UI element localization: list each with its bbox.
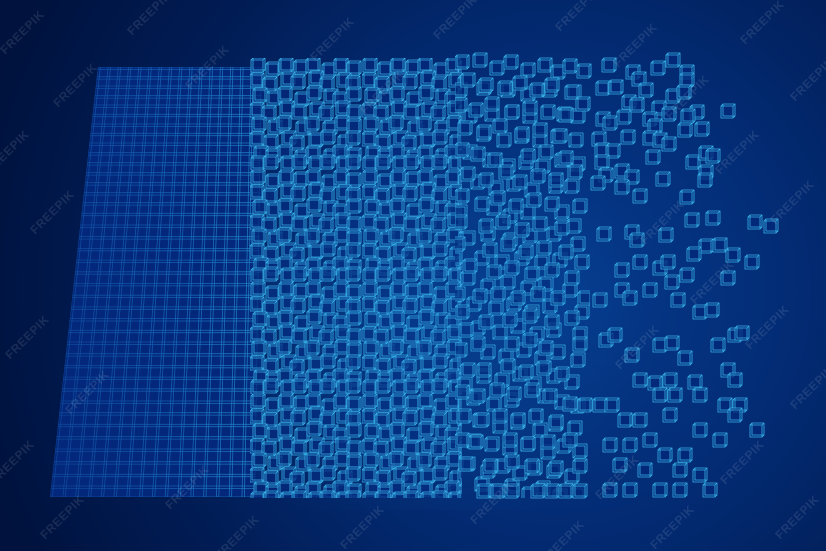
watermarks: FREEPIK xyxy=(337,502,387,551)
watermarks: FREEPIK xyxy=(647,502,697,551)
watermarks: FREEPIK xyxy=(612,322,662,372)
watermarks: FREEPIK xyxy=(50,60,100,110)
watermarks: FREEPIK xyxy=(37,492,87,542)
scattered cubes: right side xyxy=(563,53,778,497)
perspective wireframe grid xyxy=(40,60,270,500)
watermarks: FREEPIK xyxy=(712,127,762,177)
watermarks: FREEPIK xyxy=(687,257,737,307)
watermarks: FREEPIK xyxy=(717,437,767,487)
watermarks: FREEPIK xyxy=(592,452,642,502)
watermarks: FREEPIK xyxy=(742,302,792,352)
watermarks: FREEPIK xyxy=(357,67,407,117)
watermarks: FREEPIK xyxy=(637,197,687,247)
watermarks: FREEPIK xyxy=(772,492,822,542)
dense cube field xyxy=(250,58,462,498)
watermarks: FREEPIK xyxy=(182,42,232,92)
watermarks: FREEPIK xyxy=(27,187,77,237)
watermarks: FREEPIK xyxy=(662,72,712,122)
scattered cubes: transition zone xyxy=(448,53,592,503)
bottom row of cubes xyxy=(477,484,587,498)
watermarks: FREEPIK xyxy=(307,14,357,64)
central glow xyxy=(180,80,660,510)
watermarks: FREEPIK xyxy=(2,312,52,362)
watermarks: FREEPIK xyxy=(610,20,660,70)
watermarks: FREEPIK xyxy=(467,477,517,527)
watermarks: FREEPIK xyxy=(767,177,817,227)
watermarks: FREEPIK xyxy=(62,367,112,417)
watermarks: FREEPIK xyxy=(162,462,212,512)
